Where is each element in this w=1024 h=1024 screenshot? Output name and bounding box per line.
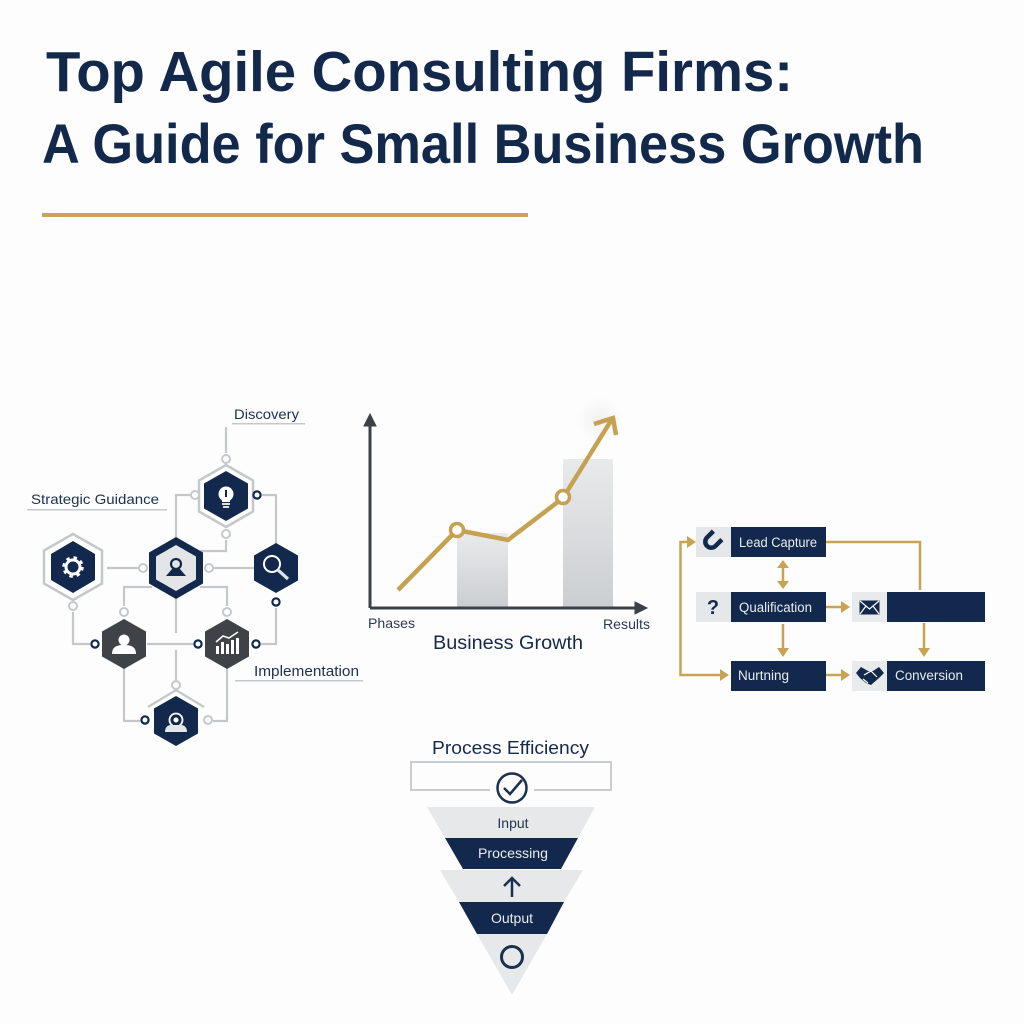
funnel upper section	[427, 807, 595, 869]
title: Top Agile Consulting Firms:	[46, 40, 793, 104]
heading frame	[411, 762, 611, 790]
label: discovery: Discovery	[234, 406, 299, 422]
icon: circle	[502, 946, 522, 968]
qualification step: ?	[707, 597, 719, 619]
nurturing step: Nurtning	[738, 668, 789, 683]
title underline	[42, 213, 528, 217]
panel: hexagon network	[27, 406, 363, 746]
hexagon: magnifier	[254, 543, 298, 593]
funnel lower section	[440, 870, 583, 995]
axis label: results: Results	[603, 616, 650, 632]
axis label: phases: Phases	[368, 615, 415, 631]
title: A Guide for Small Business Growth	[42, 112, 924, 175]
qualification step: Qualification	[739, 600, 812, 615]
lead capture step	[696, 527, 826, 557]
chart title: Business Growth	[433, 633, 583, 654]
label: strategic guidance: Strategic Guidance	[31, 491, 159, 507]
bars	[457, 459, 613, 607]
funnel lower section: Output	[491, 910, 533, 926]
funnel upper section: Processing	[478, 845, 548, 861]
hexagon: discovery lightbulb	[199, 465, 253, 527]
data points	[450, 490, 570, 536]
label: strategic guidance	[27, 491, 167, 510]
hexagon: gear	[44, 534, 102, 600]
email step	[852, 592, 985, 622]
hexagon: implementation	[148, 690, 204, 746]
chart glow	[576, 396, 624, 444]
funnel heading: Process Efficiency	[432, 738, 589, 758]
flow arrows	[680, 536, 930, 681]
connector lines	[73, 427, 276, 721]
nurturing step	[731, 661, 826, 691]
hexagon: growth chart	[205, 619, 249, 669]
hexagon: team member	[102, 619, 146, 669]
hexagon: strategic guidance person	[149, 537, 203, 599]
funnel upper section: Input	[497, 815, 529, 831]
growth line	[398, 418, 616, 590]
lead capture step: Lead Capture	[739, 535, 817, 550]
qualification step	[696, 592, 826, 622]
highlighted connector nodes	[91, 491, 280, 724]
panel: business growth chart	[364, 396, 650, 654]
icon: up arrow	[504, 878, 520, 897]
connector nodes	[69, 455, 231, 724]
panel: lead flow	[680, 527, 985, 691]
conversion step: Conversion	[895, 668, 963, 683]
axes	[364, 414, 647, 614]
title	[42, 40, 924, 175]
icon: check circle	[498, 774, 526, 802]
panel: process efficiency funnel	[411, 738, 611, 995]
conversion step	[852, 661, 985, 691]
label: implementation: Implementation	[254, 664, 359, 680]
